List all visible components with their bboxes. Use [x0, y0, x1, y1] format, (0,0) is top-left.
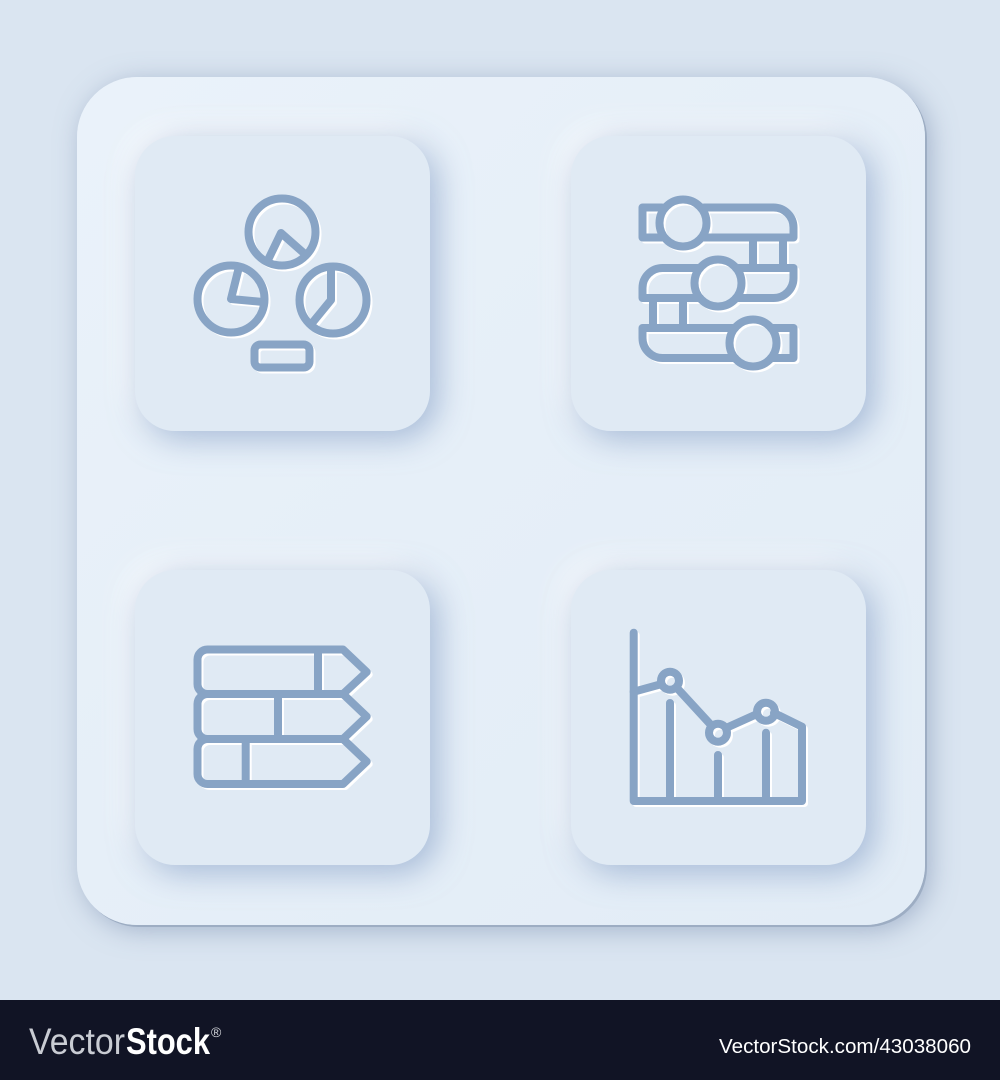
icon: line and bar chart with data points — [634, 633, 804, 804]
panel: bottom-left tile — [135, 570, 430, 865]
logo word: Vector: Vector — [29, 1021, 125, 1062]
icon: three pie charts with a legend box — [198, 198, 369, 370]
icon: three stacked arrow bars — [198, 650, 369, 786]
footer logo and image id text — [29, 1021, 971, 1062]
icon: three slider bars with round handles — [642, 200, 796, 369]
panel: top-right tile — [571, 136, 866, 431]
panel: top-left tile — [135, 136, 430, 431]
footer bar — [0, 1000, 1000, 1080]
panel: main rounded board — [77, 77, 925, 925]
image reference: VectorStock.com/43038060 — [719, 1036, 971, 1058]
registered mark: ® — [211, 1024, 222, 1040]
logo word: Stock: Stock — [126, 1021, 210, 1062]
panel: bottom-right tile — [571, 570, 866, 865]
